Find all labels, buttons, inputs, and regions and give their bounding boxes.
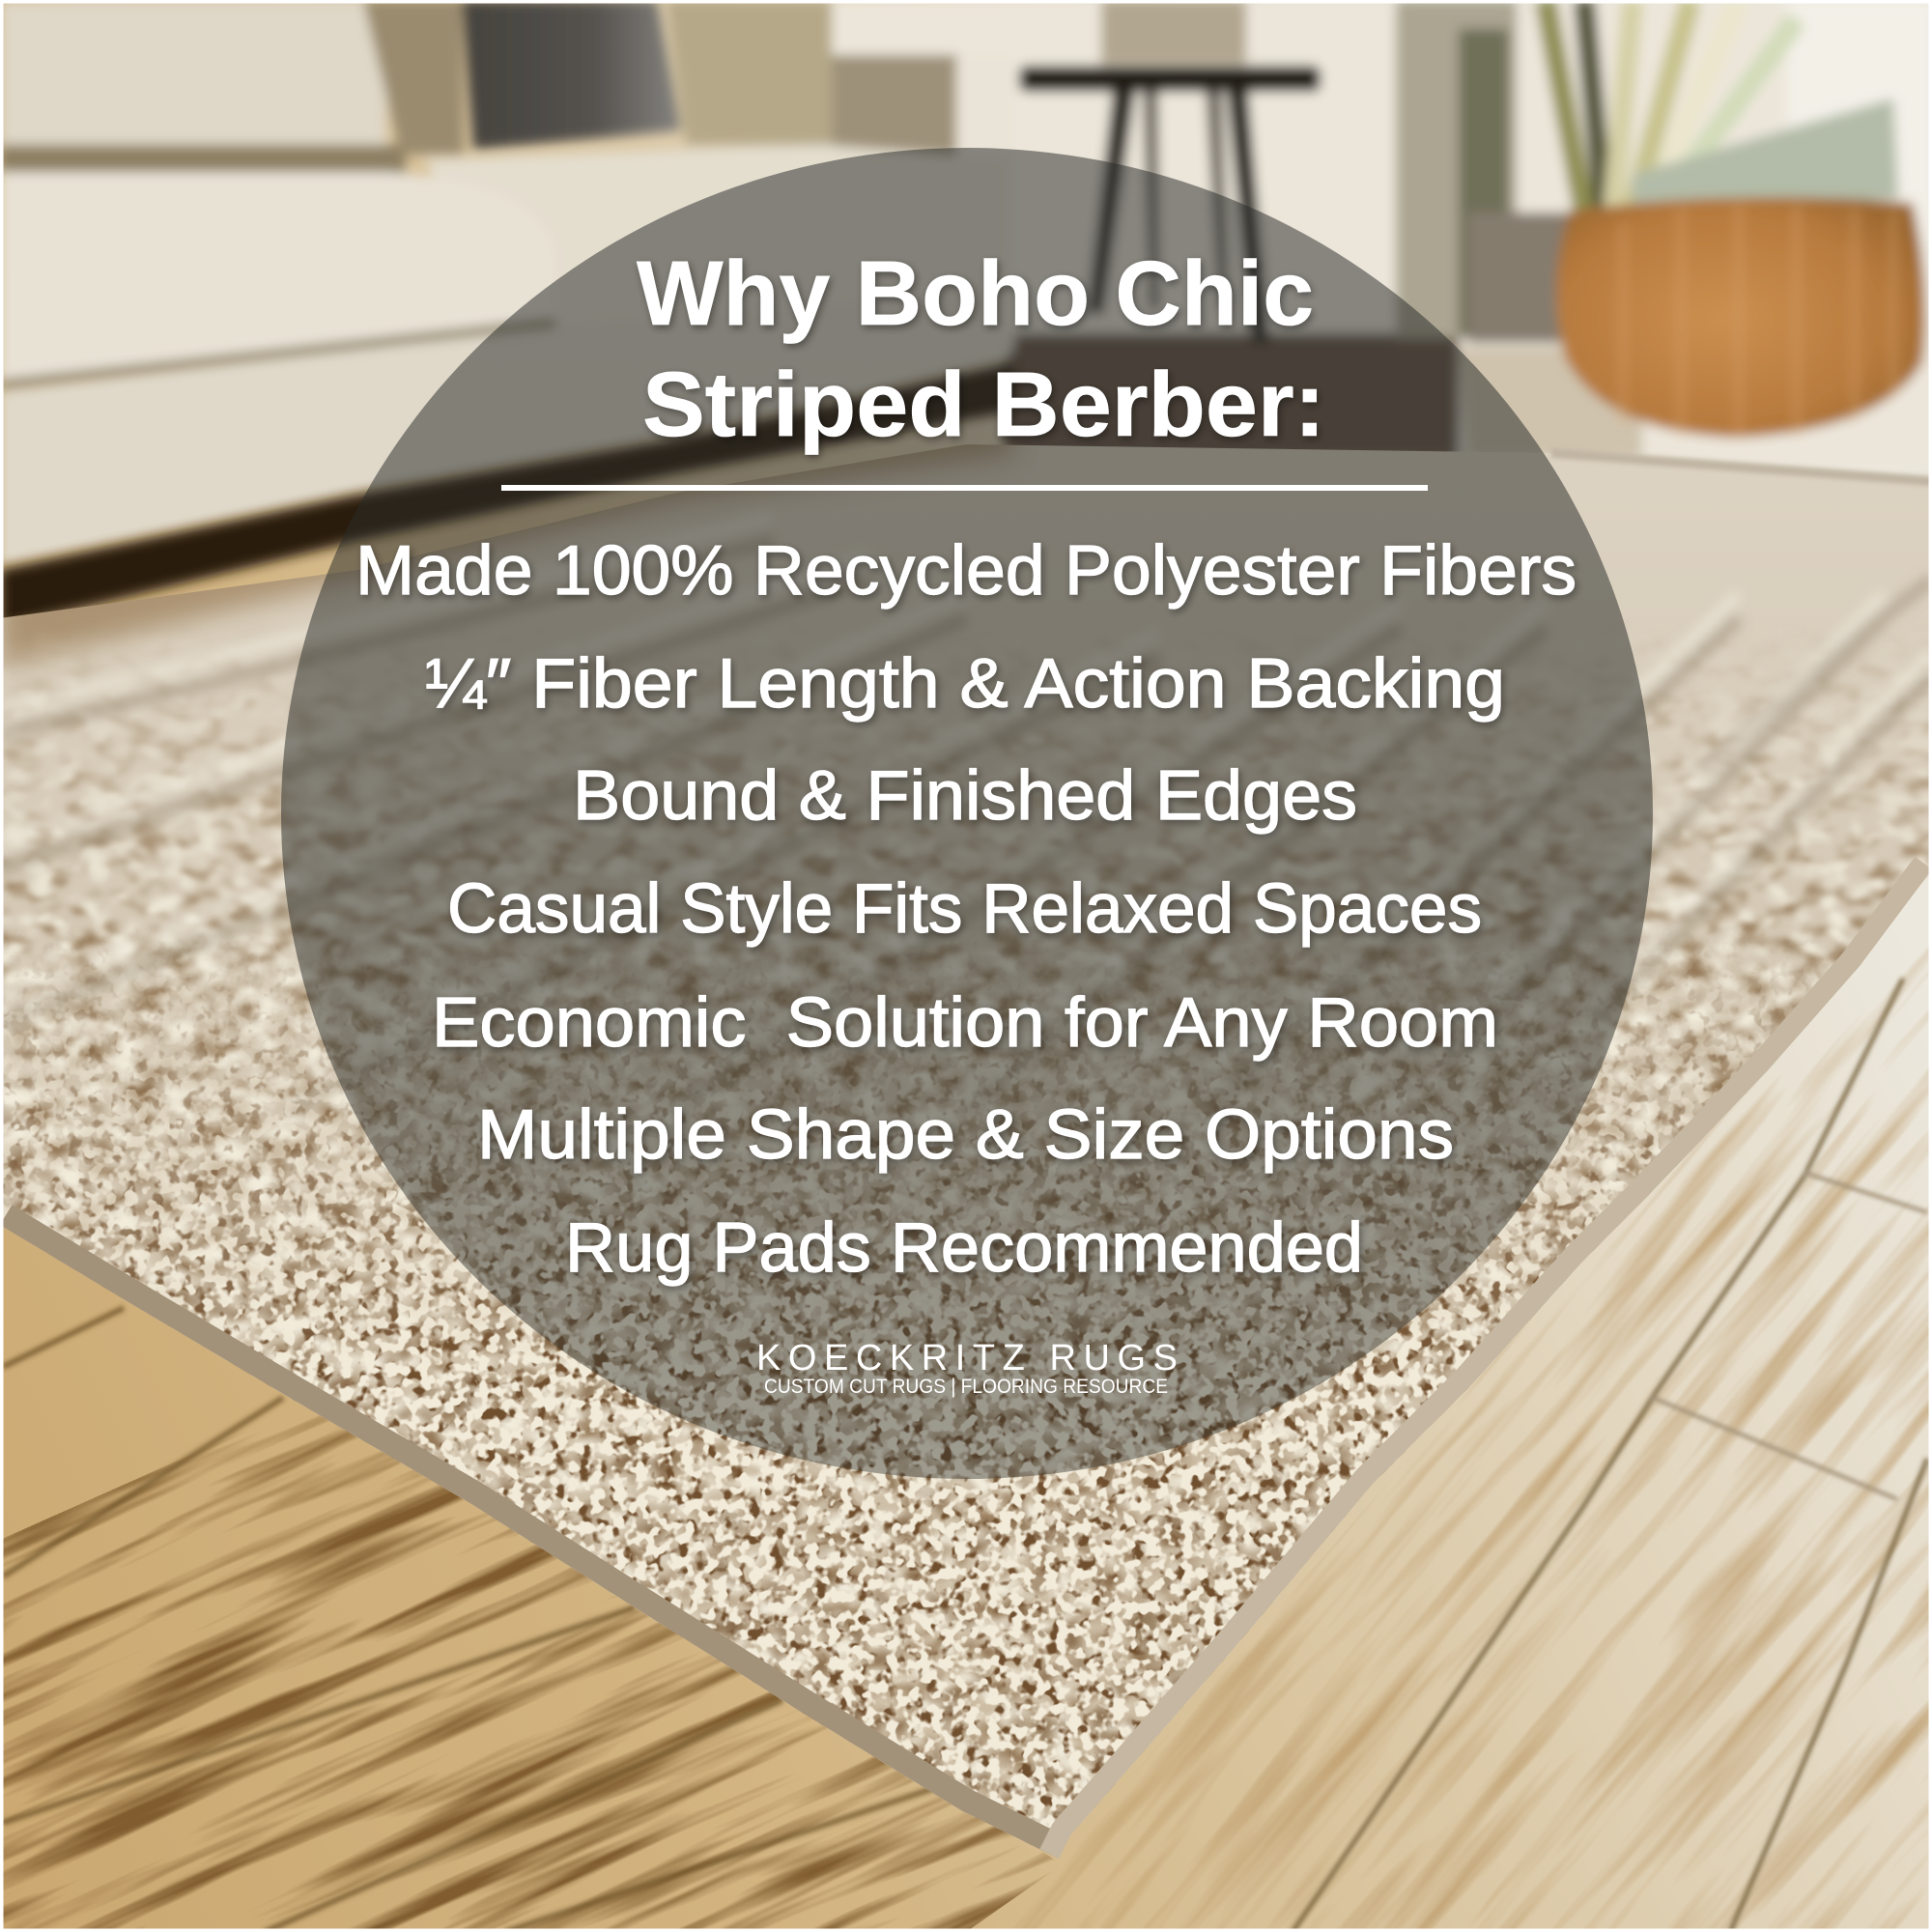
feature list: ¼″ Fiber Length & Action Backing [425,645,1505,723]
heading [637,242,1325,456]
floor plank seams [3,979,1927,1932]
sofa shadow cast on rug [0,406,1014,667]
basket pillow [1633,99,1898,214]
feature list: Casual Style Fits Relaxed Spaces [447,870,1482,948]
left wood grain [4,1416,1054,1928]
rug stripes [0,517,1932,1111]
blurred room furnishings [0,0,1932,565]
logo: CUSTOM CUT RUGS | FLOORING RESOURCE [764,1376,1168,1398]
wall [821,0,1932,353]
logo [756,1338,1178,1398]
side table [1019,66,1321,92]
feature list [355,532,1577,1287]
pot behind basket [1468,213,1575,343]
panel: translucent circle [281,148,1653,1479]
rug speckle [4,941,1837,1859]
sofa lower panel [0,290,1009,565]
feature list: Economic Solution for Any Room [432,984,1498,1062]
rear floor [1005,333,1468,459]
rug top edge [1551,453,1932,481]
wicker basket [1556,197,1925,438]
heading: Why Boho Chic [637,242,1314,345]
plant reeds [1546,0,1797,213]
logo: KOECKRITZ RUGS [756,1338,1178,1378]
feature list: Rug Pads Recommended [565,1209,1363,1287]
heading: Striped Berber: [642,354,1325,456]
sofa back cushion [0,0,386,166]
feature list: Bound & Finished Edges [573,757,1357,835]
rug [4,444,1928,1859]
vase on table [1101,0,1246,64]
heading rule [501,485,1428,491]
feature list: Multiple Shape & Size Options [477,1096,1454,1174]
sofa front cushion [0,172,555,386]
patterned screen [1396,0,1517,338]
feature list: Made 100% Recycled Polyester Fibers [355,532,1577,610]
sofa shadow [0,362,1014,628]
rug binding edge [0,1225,1059,1859]
right floor grain [1020,874,1928,1928]
rug mottling [4,662,1928,1849]
